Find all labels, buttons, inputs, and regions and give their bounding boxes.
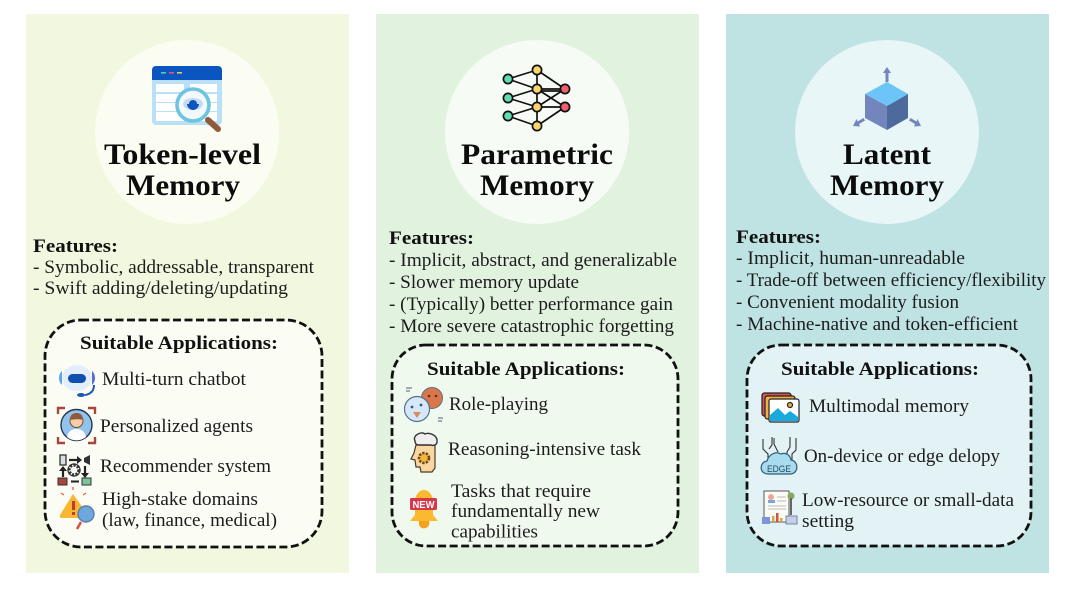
text block: features: - Machine-native and token-efficient	[736, 314, 1019, 335]
text: recommender system: Recommender system	[100, 456, 271, 477]
icon: low-resource report	[762, 491, 797, 524]
icon: recommender system	[58, 455, 91, 485]
icon: head with gear	[411, 433, 437, 472]
text block: features: - Convenient modality fusion	[736, 292, 959, 313]
heading: token-level memory	[104, 139, 261, 202]
icon: layered images	[762, 393, 799, 422]
panel: parametric memory	[376, 14, 699, 573]
panel: latent memory	[726, 14, 1049, 573]
heading: token-level memory: Memory	[126, 170, 240, 202]
text block: features: - (Typically) better performance gain	[389, 294, 674, 315]
text: high-stake domains	[102, 489, 277, 531]
text: tasks that require fundamentally new capabilities: fundamentally new	[451, 501, 600, 522]
panel: token-level memory	[26, 14, 349, 573]
icon: role-playing masks	[404, 388, 443, 422]
panel: suitable applications: Suitable Applications:	[427, 359, 625, 380]
heading: token-level memory: Token-level	[104, 139, 261, 171]
heading: parametric memory: Parametric	[461, 139, 613, 171]
heading: latent memory: Latent	[843, 139, 931, 171]
text block: features	[33, 236, 315, 299]
text: low-resource or small-data setting: Low-resource or small-data	[802, 490, 1015, 511]
text block: features: - Trade-off between efficiency/flexibility	[736, 270, 1046, 291]
icon: personalized agent	[58, 408, 95, 443]
text: high-stake domains: High-stake domains	[102, 489, 258, 510]
text block: features: Features:	[33, 236, 118, 257]
panel: suitable applications	[747, 345, 1031, 546]
text: tasks that require fundamentally new capabilities: capabilities	[451, 522, 538, 542]
text: reasoning-intensive task: Reasoning-intensive task	[448, 439, 641, 460]
heading: latent memory	[830, 139, 944, 202]
icon: new bell: NEW	[412, 500, 435, 511]
icon: warning with magnifier	[60, 487, 94, 529]
text: role-playing: Role-playing	[449, 394, 548, 415]
text: tasks that require fundamentally new capabilities	[451, 481, 600, 542]
icon: edge cloud	[761, 437, 797, 474]
text block: features: Features:	[389, 228, 474, 249]
text: tasks that require fundamentally new capabilities: Tasks that require	[451, 481, 591, 502]
text: on-device or edge deploy: On-device or edge delopy	[804, 446, 1000, 467]
text: low-resource or small-data setting	[802, 490, 1015, 532]
text block: features: Features:	[736, 227, 821, 248]
icon: table with magnifier	[152, 66, 222, 129]
text block: features: - Implicit, abstract, and generalizable	[389, 250, 677, 271]
text block: features: - Implicit, human-unreadable	[736, 248, 965, 269]
text: multimodal memory: Multimodal memory	[809, 396, 969, 417]
text block: features	[389, 228, 677, 337]
text block: features: - Slower memory update	[389, 272, 579, 293]
text block: features: - Swift adding/deleting/updating	[33, 278, 289, 299]
icon: chatbot	[59, 365, 95, 397]
panel: suitable applications	[392, 345, 678, 546]
text: low-resource or small-data setting: setting	[802, 511, 855, 532]
panel: suitable applications: Suitable Applications:	[80, 333, 278, 354]
icon: edge cloud: EDGE	[767, 464, 791, 474]
text block: features: - Symbolic, addressable, transparent	[33, 257, 315, 278]
text: multi-turn chatbot: Multi-turn chatbot	[102, 369, 247, 390]
heading: parametric memory	[461, 139, 613, 202]
icon: new bell	[410, 490, 438, 528]
panel: suitable applications	[45, 320, 322, 547]
text block: features	[736, 227, 1046, 335]
heading: parametric memory: Memory	[480, 170, 594, 202]
heading: latent memory: Memory	[830, 170, 944, 202]
panel: suitable applications: Suitable Applications:	[781, 359, 979, 380]
text block: features: - More severe catastrophic forgetting	[389, 316, 675, 337]
text: personalized agents: Personalized agents	[100, 416, 253, 437]
icon: cube with arrows	[853, 67, 921, 130]
text: high-stake domains: (law, finance, medical)	[102, 510, 277, 531]
icon: neural network	[503, 65, 570, 131]
